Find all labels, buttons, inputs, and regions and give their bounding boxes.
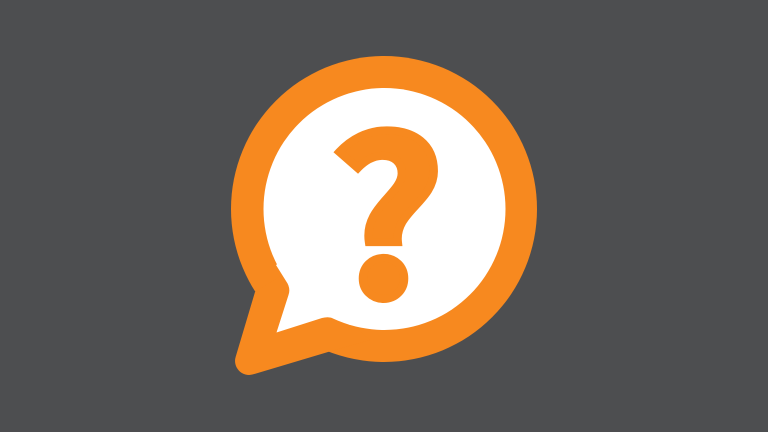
white bubble interior — [264, 88, 506, 332]
question mark: ? — [329, 48, 445, 358]
orange bubble outline — [231, 56, 537, 375]
